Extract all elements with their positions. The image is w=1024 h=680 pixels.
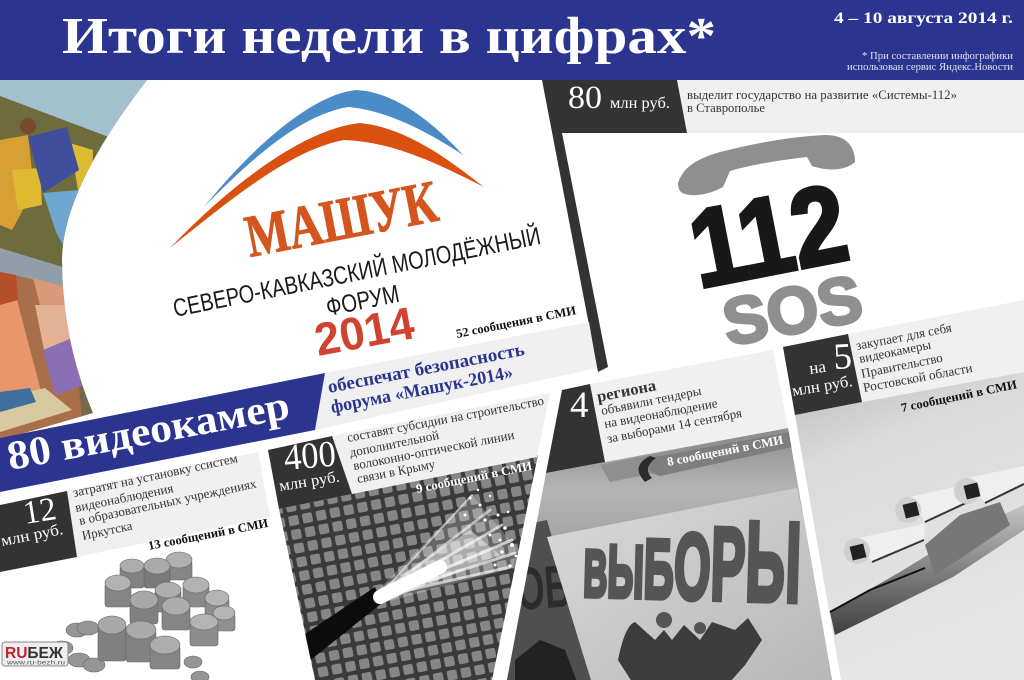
caption [346,393,545,486]
112 number: 112 [680,161,857,312]
caption [687,87,957,115]
amount: 12 [21,491,59,532]
dark amount block [783,334,862,415]
caption: в Ставрополье [687,100,765,115]
panel: elections photo [500,350,840,680]
source note: * При составлении инфографики [862,51,1013,62]
caption: видеонаблюдения [74,480,175,515]
caption heading: региона [595,377,658,406]
gray caption band [677,80,1024,133]
caption: Правительство [860,350,944,381]
caption [855,320,974,395]
icon: camera one [844,524,925,564]
poster sheet [547,488,840,680]
amount: 5 [832,336,853,378]
blue banner [0,373,325,492]
icon: mount bracket [925,502,1010,575]
gray caption band [332,393,550,494]
caption: за выборами 14 сентября [606,405,743,446]
caption: в образовательных учреждениях [78,476,258,528]
panel: emergency 112 [542,80,1024,372]
watermark logo: RUБЕЖ [5,645,64,662]
source note [847,51,1013,73]
dark amount block [0,491,77,572]
panel: forum photo collage [0,80,147,438]
amount prefix: на [808,357,827,378]
headline: 80 видеокамер [3,382,293,479]
dark frame [542,80,687,372]
amount unit: млн руб. [0,521,65,550]
header band [0,0,1024,80]
caption: на видеонаблюдение [603,395,719,431]
amount unit: млн руб. [610,95,670,112]
caption: Иркутска [81,518,134,543]
fibre photo [270,450,550,680]
icon: camera three [954,466,1024,504]
caption: затратят на установку ссистем [72,450,239,500]
caption: составят субсидии на строительство [346,393,545,445]
caption: видеокамеры [858,337,932,366]
icon: fibre cable [305,587,381,660]
message count: 7 сообщений в СМИ [900,377,1018,415]
panel: Mashuk forum logo [170,90,543,366]
gray caption band [590,350,788,462]
panel: 80 cameras headline [0,322,597,492]
caption: выделит государство на развитие «Системы-112» [687,87,957,102]
amount: 4 [570,385,588,426]
dark amount block [268,436,352,509]
caption [600,383,743,446]
caption: обеспечат безопасность [326,340,526,398]
icon: blue arc [204,90,463,207]
caption: закупает для себя [855,320,953,353]
panel: 12 million coins [0,450,270,680]
gray caption band [848,300,1024,402]
caption: форума «Машук-2014» [329,363,515,418]
SOS: SOS [717,260,868,360]
poster lettering: ВЫБОРЫ [582,494,803,627]
source note: использован сервис Яндекс.Новости [847,62,1013,73]
icon: double-headed eagle [618,612,762,680]
gray caption band [67,452,270,557]
watermark logo: www.ru-bezh.ru [6,660,65,666]
caption: связи в Крыму [356,456,437,486]
amount: 400 [282,434,338,479]
gray caption band [315,322,597,430]
amount unit: млн руб. [791,373,854,400]
message count: 9 сообщений в СМИ [415,459,533,496]
forum year: 2014 [310,296,419,366]
icon: coin pile [51,552,235,680]
forum message count: 52 сообщения в СМИ [455,303,577,341]
icon: telephone handset [678,135,855,195]
watermark logo [2,642,68,666]
panel: 400 million fibre optics [268,393,550,680]
panel: 5 million CCTV cameras [783,300,1024,680]
amount unit: млн руб. [278,469,341,495]
forum word: ФОРУМ [324,280,402,322]
dark amount block [546,384,605,473]
poster left fragment: ОБ [514,553,573,623]
date: 4 – 10 августа 2014 г. [834,10,1013,27]
forum name: СЕВЕРО-КАВКАЗСКИЙ МОЛОДЁЖНЫЙ [170,220,543,323]
caption: дополнительной [348,427,440,460]
icon: camera two [895,484,968,523]
icon: orange arc [170,123,484,248]
caption: объявили тендеры [600,383,703,418]
caption [72,450,258,543]
message count: 13 сообщений в СМИ [147,516,270,553]
caption: Ростовской области [862,360,974,395]
amount: 80 [568,80,602,116]
message count: 8 сообщений в СМИ [666,433,785,469]
logo wordmark: МАШУК [240,168,443,270]
caption: волоконно-оптической линии [352,427,516,473]
icon: pole [830,505,1024,635]
title: Итоги недели в цифрах* [62,8,716,65]
